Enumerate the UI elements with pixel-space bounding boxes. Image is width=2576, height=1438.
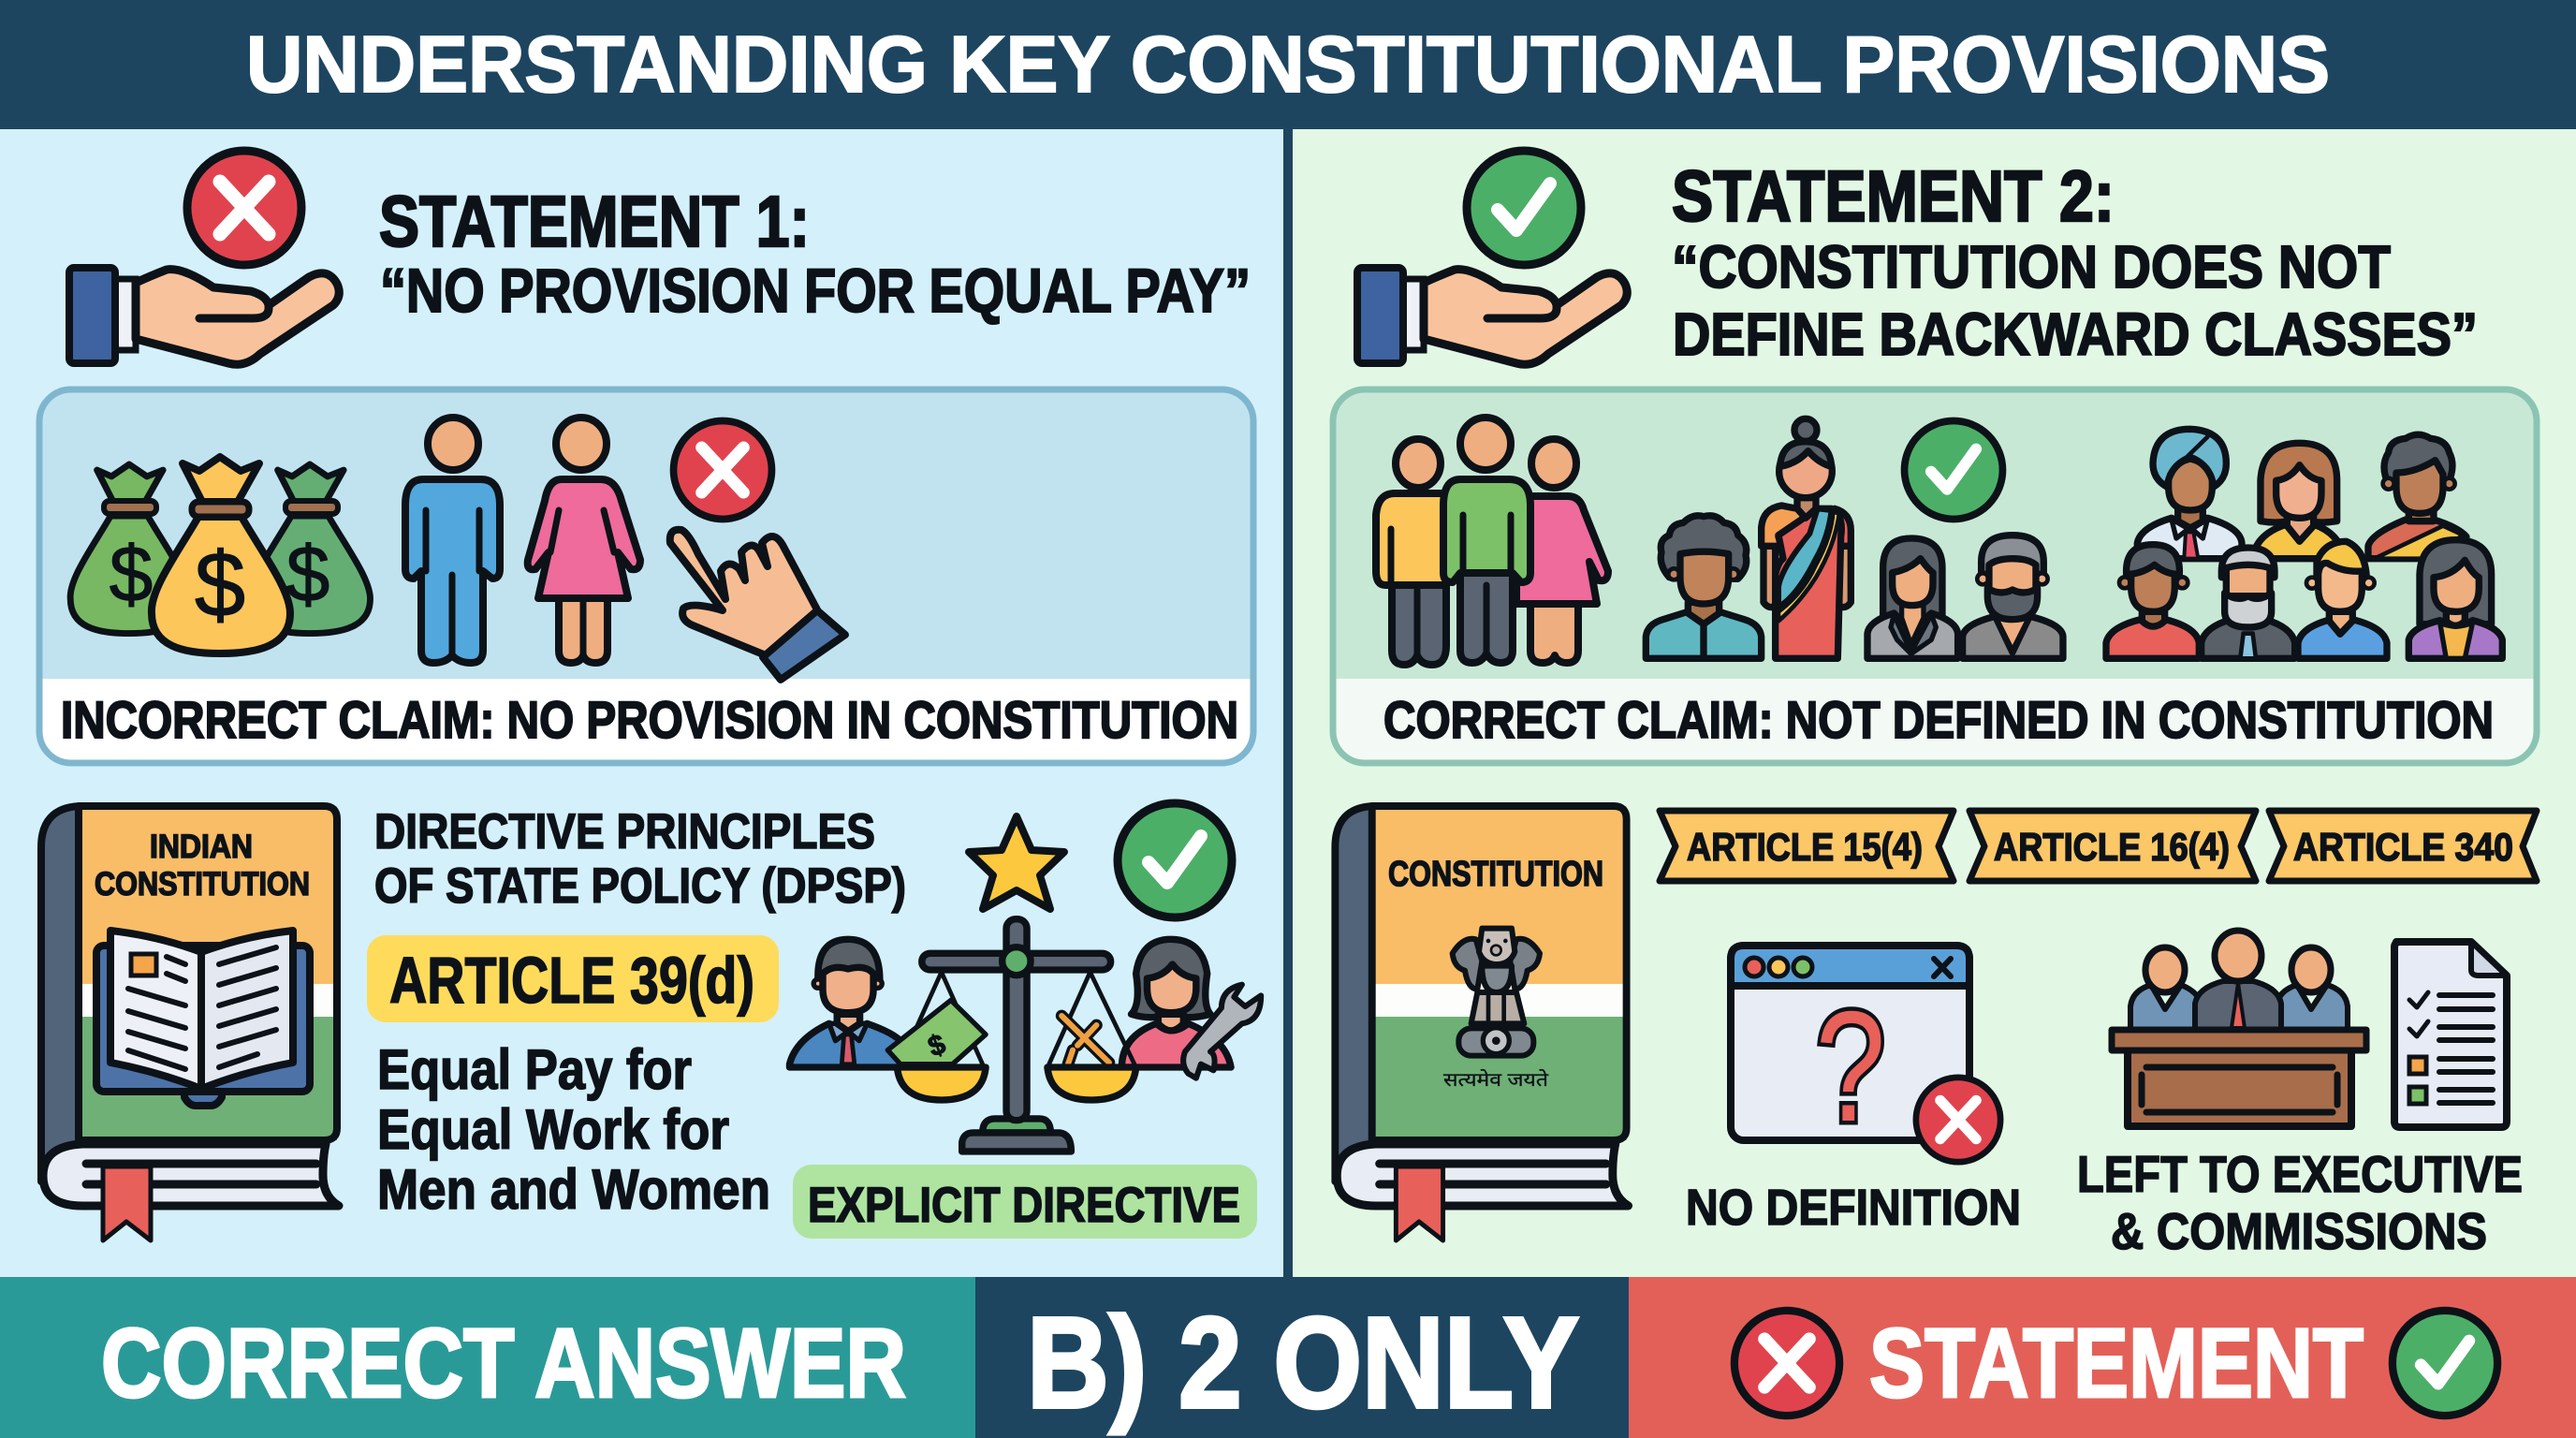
icon: hand with green check xyxy=(1357,151,1627,364)
statement 2 quote: DEFINE BACKWARD CLASSES” xyxy=(1673,301,2478,368)
book label second line: CONSTITUTION xyxy=(95,866,310,902)
DPSP heading: OF STATE POLICY (DPSP) xyxy=(374,858,906,914)
card: correct claim xyxy=(1333,389,2537,763)
ribbon: article 15(4) xyxy=(1660,811,1954,881)
icon: red cross xyxy=(1734,1311,1839,1416)
statement 2 heading: STATEMENT 2: xyxy=(1672,156,2115,237)
ribbon: article 340 xyxy=(2269,811,2537,881)
article 39(d) pill xyxy=(367,935,779,1022)
footer: correct answer: CORRECT ANSWER xyxy=(101,1309,906,1418)
icon: Indian constitution book xyxy=(41,806,339,1240)
icon: hand with red cross xyxy=(69,151,339,364)
front row xyxy=(2106,540,2502,658)
icon: man figure xyxy=(405,418,500,663)
explicit directive pill xyxy=(793,1165,1257,1239)
icon: three person group xyxy=(1376,418,1608,665)
DPSP heading xyxy=(374,804,906,914)
icon: woman in suit xyxy=(1867,538,1958,658)
panel: statement 1 xyxy=(0,129,1283,1277)
article ribbons xyxy=(1660,811,2537,881)
icon: woman figure xyxy=(528,418,640,663)
header title bar xyxy=(0,0,2576,129)
question mark: ? xyxy=(1816,979,1885,1154)
icon: money bags: $ xyxy=(195,533,245,636)
incorrect claim caption: INCORRECT CLAIM: NO PROVISION IN CONSTITUTION xyxy=(61,690,1238,749)
open book on cover xyxy=(96,931,310,1106)
icon: scales with man and woman xyxy=(790,919,1261,1152)
card: incorrect claim xyxy=(39,389,1253,763)
footer: statement verdict: STATEMENT xyxy=(1869,1309,2364,1418)
icon: window with question mark xyxy=(1731,946,2000,1162)
icon: check mark xyxy=(1905,421,2002,519)
icon: money bags: $ xyxy=(286,530,329,618)
tools in right pan xyxy=(1061,1016,1109,1064)
DPSP heading: DIRECTIVE PRINCIPLES xyxy=(374,804,875,859)
icon: green check xyxy=(1118,803,1232,917)
footer: statement verdict xyxy=(1629,1277,2576,1438)
footer: answer: B) 2 ONLY xyxy=(1027,1291,1579,1435)
icon: red cross xyxy=(674,421,771,519)
icon: money bags: $ xyxy=(110,530,153,618)
ribbon: article 16(4) xyxy=(1969,811,2256,881)
red cross badge xyxy=(1916,1078,2000,1162)
money in left pan xyxy=(887,1000,986,1064)
icon: green check xyxy=(2393,1311,2497,1416)
title: UNDERSTANDING KEY CONSTITUTIONAL PROVISIONS xyxy=(246,21,2330,110)
equal pay description: Equal Pay for xyxy=(377,1038,692,1101)
national emblem xyxy=(1453,929,1540,1056)
explicit directive pill: EXPLICIT DIRECTIVE xyxy=(808,1178,1240,1233)
statement 1 heading: STATEMENT 1: xyxy=(379,182,810,262)
wrench xyxy=(1183,985,1261,1078)
scale pans xyxy=(897,1067,1136,1100)
equal pay description: Equal Work for xyxy=(377,1098,729,1161)
man bust xyxy=(790,939,902,1067)
icon: bearded man xyxy=(1963,536,2063,658)
panel background left xyxy=(0,129,1283,1277)
footer: correct answer xyxy=(0,1277,975,1438)
equal pay description xyxy=(377,1038,770,1221)
divider between panels xyxy=(1283,129,1293,1277)
ribbon: article 16(4): ARTICLE 16(4) xyxy=(1994,825,2230,869)
book label: INDIAN xyxy=(150,829,253,865)
emblem motto: सत्यमेव जयते xyxy=(1443,1068,1549,1091)
no definition label: NO DEFINITION xyxy=(1686,1180,2021,1236)
ribbon: article 15(4): ARTICLE 15(4) xyxy=(1687,825,1923,869)
left to executive label xyxy=(2077,1145,2523,1260)
icon: commission panel at desk xyxy=(2112,931,2366,1126)
icon: curly haired man xyxy=(1646,516,1762,658)
people row: saree woman, curly man, suit woman, bearded man xyxy=(1646,418,2063,658)
statement 2 quote: “CONSTITUTION DOES NOT xyxy=(1672,233,2391,301)
icon: diverse crowd xyxy=(2106,429,2502,658)
left to executive label: & COMMISSIONS xyxy=(2111,1202,2487,1260)
icon: pointing hand xyxy=(670,530,845,680)
panel background right xyxy=(1293,129,2576,1277)
back row xyxy=(2137,429,2466,559)
statement 1 quote: “NO PROVISION FOR EQUAL PAY” xyxy=(380,256,1251,325)
article 39(d) pill: ARTICLE 39(d) xyxy=(389,944,754,1017)
money in left pan: $ xyxy=(924,1029,950,1063)
icon: checklist document xyxy=(2394,942,2507,1127)
book label: CONSTITUTION xyxy=(1388,855,1603,894)
icon: constitution book with emblem xyxy=(1335,806,1629,1240)
icon: star xyxy=(969,816,1064,909)
panel: statement 2 xyxy=(1293,129,2576,1277)
icon: woman in saree xyxy=(1762,418,1851,658)
woman bust xyxy=(1121,939,1231,1067)
icon: money bags xyxy=(70,457,370,653)
equal pay description: Men and Women xyxy=(377,1158,770,1221)
footer bar xyxy=(0,1277,2576,1438)
scale stand xyxy=(916,919,1134,1152)
ribbon: article 340: ARTICLE 340 xyxy=(2293,825,2513,869)
statement 2 quote xyxy=(1672,233,2478,368)
